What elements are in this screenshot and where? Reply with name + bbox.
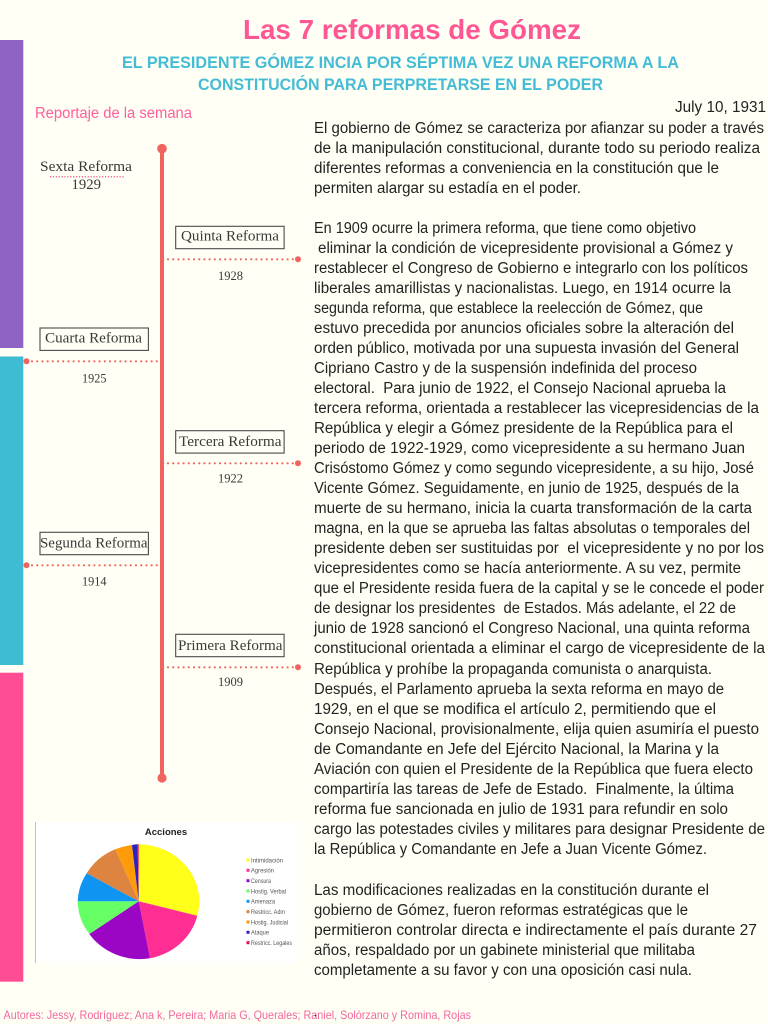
chart legend: Restricc. Adm — [251, 909, 285, 916]
text block: chronology of the reforms: En 1909 ocurre la primera reforma, que tiene como objetivo — [314, 220, 696, 237]
text block: chronology of the reforms: electoral. Para junio de 1922, el Consejo Nacional aprueba la — [314, 380, 726, 397]
subtitle — [122, 53, 679, 94]
text block: conclusion — [314, 882, 757, 979]
timeline event: Primera Reforma 1909 — [168, 634, 301, 689]
text block: introduction: diferentes reformas a conveniencia en la constitución que le — [314, 160, 719, 177]
text block: chronology of the reforms: Consejo Nacional, provisionalmente, elija quien asumiría el puesto — [314, 721, 759, 738]
subtitle: EL PRESIDENTE GÓMEZ INCIA POR SÉPTIMA VEZ UNA REFORMA A LA — [122, 53, 679, 72]
text block: conclusion: Las modificaciones realizadas en la constitución durante el — [314, 882, 709, 899]
text block: chronology of the reforms: Vicente Gómez. Seguidamente, en junio de 1925, después de la — [314, 480, 739, 497]
text block: chronology of the reforms: de designar los presidentes de Estados. Más adelante, el 22 de — [314, 600, 736, 617]
text block: introduction: El gobierno de Gómez se caracteriza por afianzar su poder a través — [314, 120, 764, 137]
timeline event: Cuarta Reforma 1925: 1925 — [82, 372, 106, 386]
text block: chronology of the reforms: reforma fue sancionada en julio de 1931 para refundir en solo — [314, 801, 728, 818]
timeline event: Tercera Reforma 1922 — [168, 431, 301, 486]
timeline event: Quinta Reforma 1928 — [168, 226, 301, 283]
text block: introduction: permiten alargar su estadía en el poder. — [314, 180, 581, 197]
text block: chronology of the reforms: tercera reforma, orientada a restablecer las vicepresidencias de la — [314, 400, 759, 417]
subtitle: CONSTITUCIÓN PARA PERPRETARSE EN EL PODER — [198, 75, 603, 94]
pie chart: Acciones — [35, 822, 298, 963]
text block: chronology of the reforms: de Comandante en Jefe del Ejército Nacional, la Marina y la — [314, 741, 719, 758]
timeline event: Primera Reforma 1909: 1909 — [218, 675, 243, 689]
timeline event: Segunda Reforma 1914: 1914 — [82, 575, 107, 589]
chart legend: Amenaza — [251, 899, 275, 906]
text block: chronology of the reforms: compartiría las tareas de Jefe de Estado. Finalmente, la última — [314, 781, 734, 798]
sidebar color bars — [0, 40, 23, 982]
chart legend: Intimidación — [251, 857, 283, 864]
text block: chronology of the reforms: junio de 1928 sancionó el Congreso Nacional, una quinta reforma — [313, 620, 750, 637]
timeline event: Cuarta Reforma 1925 — [24, 328, 157, 386]
timeline event: Sexta Reforma 1929: Sexta Reforma — [40, 159, 133, 175]
chart legend: Agresión — [251, 868, 274, 875]
text block: chronology of the reforms: muerte de su hermano, inicia la cuarta transformación de la carta — [314, 500, 752, 517]
text block: chronology of the reforms: presidente deben ser sustituidas por el vicepresidente y no por los — [314, 540, 764, 557]
timeline event: Cuarta Reforma 1925: Cuarta Reforma — [45, 331, 143, 347]
text block: introduction — [314, 120, 764, 197]
text block: conclusion: años, respaldado por un gabinete ministerial que militaba — [314, 942, 695, 959]
timeline event: Primera Reforma 1909: Primera Reforma — [178, 638, 283, 654]
timeline event: Tercera Reforma 1922: Tercera Reforma — [179, 434, 282, 450]
timeline event: Tercera Reforma 1922: 1922 — [218, 472, 243, 486]
timeline event: Segunda Reforma 1914: Segunda Reforma — [40, 535, 148, 551]
text block: chronology of the reforms: Aviación con quien el Presidente de la República que fuera electo — [314, 761, 753, 778]
chart legend: Hostig. Judicial — [251, 919, 288, 926]
text block: chronology of the reforms: restablecer el Congreso de Gobierno e integrarlo con los políticos — [314, 260, 748, 277]
section label: reportaje: Reportaje de la semana — [35, 105, 192, 122]
chart legend: Restricc. Legales — [251, 940, 293, 947]
date: July 10, 1931 — [675, 99, 766, 116]
text block: chronology of the reforms: orden público, motivada por una supuesta invasión del General — [314, 340, 739, 357]
timeline axis — [157, 144, 167, 783]
text block: chronology of the reforms: 1929, en el que se modifica el artículo 2, permitiendo que el — [314, 701, 716, 718]
text block: chronology of the reforms: Cipriano Castro y de la suspensión indefinida del proceso — [314, 360, 697, 377]
text block: chronology of the reforms: eliminar la condición de vicepresidente provisional a Gómez y — [318, 240, 733, 257]
text block: chronology of the reforms: Después, el Parlamento aprueba la sexta reforma en mayo de — [314, 681, 724, 698]
chart legend: Censura — [251, 878, 271, 885]
timeline event: Quinta Reforma 1928: Quinta Reforma — [181, 229, 280, 245]
text block: chronology of the reforms: la República y Comandante en Jefe a Juan Vicente Gómez. — [314, 841, 707, 858]
pie chart: Acciones: Acciones — [145, 827, 187, 838]
timeline event: Sexta Reforma 1929 — [40, 159, 133, 193]
timeline event: Quinta Reforma 1928: 1928 — [218, 269, 243, 283]
timeline event: Sexta Reforma 1929: 1929 — [72, 177, 101, 193]
title: Las 7 reformas de Gómez — [243, 14, 581, 45]
text block: chronology of the reforms: que el Presidente resida fuera de la capital y se le concede el poder — [314, 580, 764, 597]
timeline event: Segunda Reforma 1914 — [24, 532, 157, 589]
text block: chronology of the reforms: constitucional orientada a eliminar el cargo de vicepresidente de la — [314, 640, 765, 657]
chart legend: Hostig. Verbal — [251, 888, 286, 895]
text block: conclusion: permitieron controlar directa e indirectamente el país durante 27 — [314, 922, 757, 939]
text block: chronology of the reforms: periodo de 1922-1929, como vicepresidente a su hermano Juan — [314, 440, 745, 457]
text block: chronology of the reforms: vicepresidentes como se hacía anteriormente. A su vez, permite — [314, 560, 741, 577]
text block: chronology of the reforms — [313, 220, 765, 858]
text block: chronology of the reforms: segunda reforma, que establece la reelección de Gómez, que — [314, 300, 703, 317]
text block: chronology of the reforms: República y prohíbe la propaganda comunista o anarquista. — [314, 661, 712, 678]
text block: chronology of the reforms: República y elegir a Gómez presidente de la República para el — [314, 420, 733, 437]
chart legend: Ataque — [251, 930, 269, 937]
text block: chronology of the reforms: liberales amarillistas y nacionalistas. Luego, en 1914 ocurre la — [314, 280, 731, 297]
chart legend — [246, 857, 293, 947]
text block: conclusion: completamente a su favor y con una oposición casi nula. — [314, 962, 692, 979]
text block: introduction: de la manipulación constitucional, durante todo su periodo realiza — [314, 140, 760, 157]
text block: chronology of the reforms: Crisóstomo Gómez y como segundo vicepresidente, a su hijo, José — [314, 460, 754, 477]
text block: conclusion: gobierno de Gómez, fueron reformas estratégicas que le — [314, 902, 688, 919]
authors footer: Autores: Jessy, Rodríguez; Ana k, Pereira; Maria G, Querales; Raniel, Solórzano y Romina, Rojas — [4, 1008, 471, 1022]
text block: chronology of the reforms: magna, en la que se aprueba las faltas absolutas o temporales del — [314, 520, 750, 537]
text block: chronology of the reforms: cargo las potestades civiles y militares para designar Presidente de — [314, 821, 765, 838]
text block: chronology of the reforms: estuvo precedida por anuncios oficiales sobre la alteración del — [314, 320, 734, 337]
